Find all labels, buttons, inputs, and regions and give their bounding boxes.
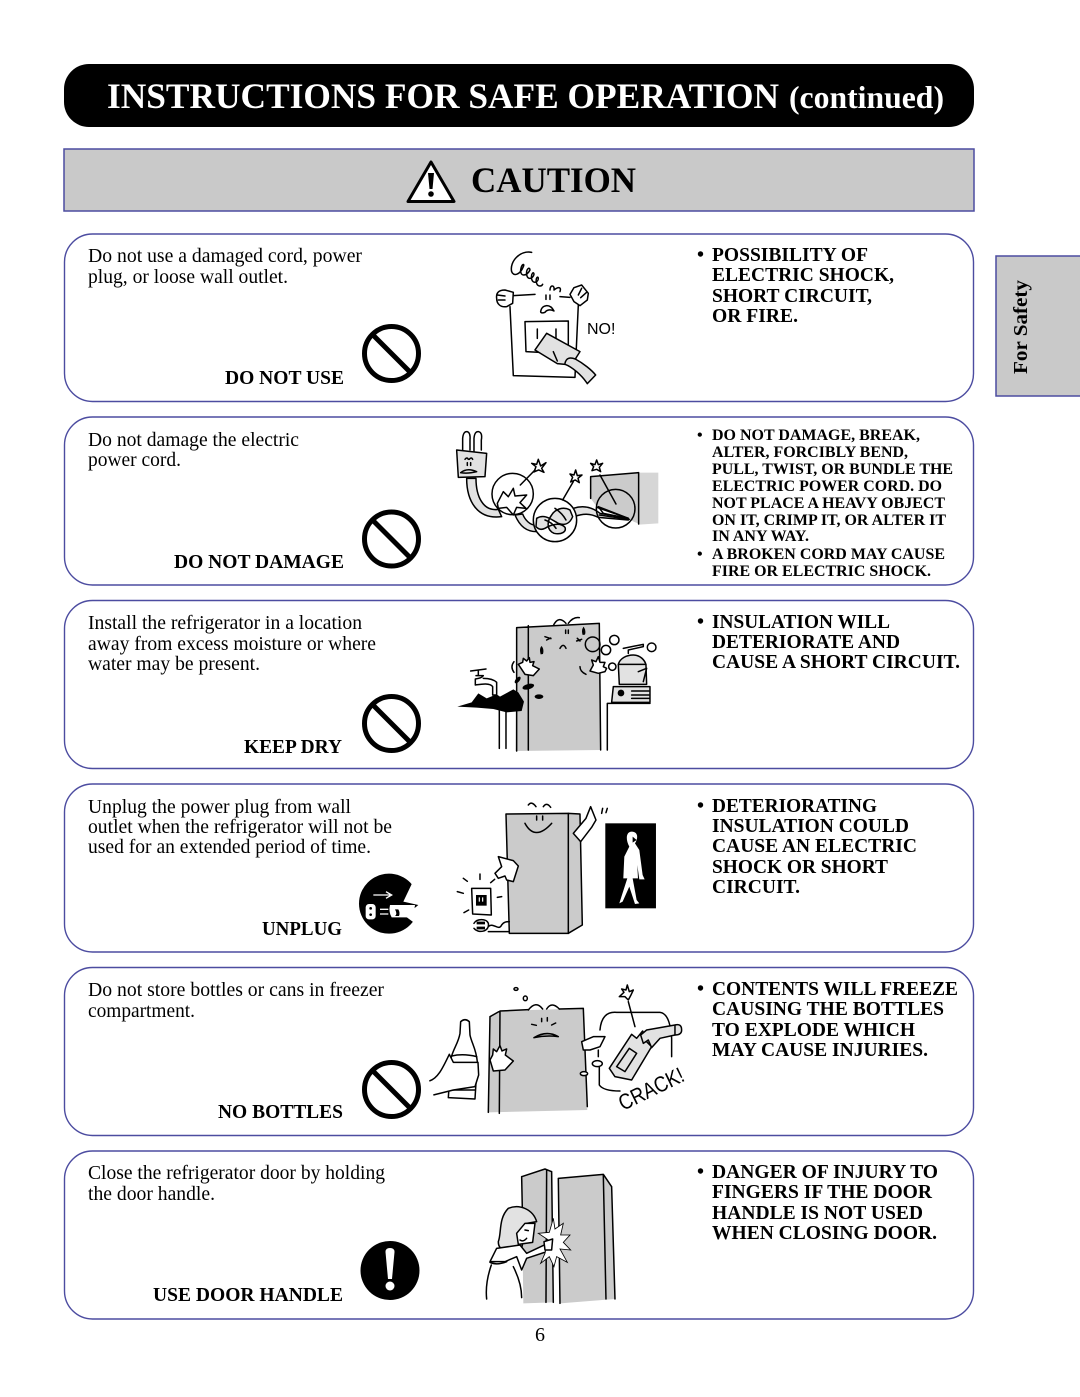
icon: prohibition [364, 512, 418, 566]
illustration: door closing on fingers [486, 1169, 615, 1303]
label: KEEP DRY [244, 736, 343, 758]
instruction text: Do not store bottles or cans in freezer [88, 979, 384, 1001]
panel: do not use [64, 234, 974, 402]
consequence text: CONTENTS WILL FREEZE [712, 978, 958, 1000]
illustration: damaged cord [457, 432, 658, 542]
title banner: (continued) [789, 79, 944, 115]
consequence text: OR FIRE. [712, 305, 798, 327]
caution banner [64, 149, 974, 211]
instruction text: plug, or loose wall outlet. [88, 266, 288, 288]
consequence text: POSSIBILITY OF [712, 244, 868, 266]
consequence text: SHOCK OR SHORT [712, 856, 889, 878]
consequence text: CAUSE AN ELECTRIC [712, 835, 917, 857]
instruction text: compartment. [88, 1000, 195, 1022]
consequence text: DETERIORATE AND [712, 631, 900, 653]
consequence text: WHEN CLOSING DOOR. [712, 1222, 937, 1244]
title banner [64, 64, 974, 127]
instruction text: water may be present. [88, 653, 260, 675]
icon: walking woman [605, 823, 656, 908]
consequence text: NOT PLACE A HEAVY OBJECT [712, 495, 945, 512]
consequence text [697, 611, 960, 673]
icon: prohibition [364, 696, 418, 750]
panel: unplug [64, 784, 974, 952]
consequence text: FINGERS IF THE DOOR [712, 1181, 933, 1203]
consequence text: • [697, 546, 703, 563]
panel: use door handle [64, 1151, 974, 1319]
consequence text: HANDLE IS NOT USED [712, 1202, 923, 1224]
instruction text: Do not use a damaged cord, power [88, 245, 362, 267]
consequence text: ALTER, FORCIBLY BEND, [712, 444, 908, 461]
illustration: fridge [457, 803, 607, 933]
instruction text: Do not damage the electric [88, 429, 299, 451]
consequence text: DO NOT DAMAGE, BREAK, [712, 427, 920, 444]
panel: keep dry [64, 600, 974, 768]
instruction text: Install the refrigerator in a location [88, 612, 362, 634]
instruction text [88, 979, 384, 1022]
consequence text: CAUSING THE BOTTLES [712, 998, 944, 1020]
instruction text [88, 612, 376, 675]
consequence text: ON IT, CRIMP IT, OR ALTER IT [712, 512, 946, 529]
consequence text: CIRCUIT. [712, 876, 800, 898]
illustration: bottles in freezer [429, 985, 682, 1113]
panel: no bottles [64, 968, 974, 1136]
consequence text: • [697, 244, 704, 266]
icon: unplug [359, 874, 428, 934]
text: crack: CRACK! [614, 1062, 688, 1115]
consequence text: IN ANY WAY. [712, 528, 809, 545]
instruction text: the door handle. [88, 1183, 215, 1205]
consequence text: ELECTRIC POWER CORD. DO [712, 478, 942, 495]
consequence text [697, 244, 894, 327]
caution banner: CAUTION [471, 160, 636, 200]
label: DO NOT DAMAGE [174, 551, 344, 573]
icon: prohibition [364, 326, 418, 380]
panel: do not damage [64, 417, 974, 585]
instruction text [88, 1162, 385, 1205]
instruction text: outlet when the refrigerator will not be [88, 816, 392, 838]
consequence text: • [697, 1161, 704, 1183]
label: USE DOOR HANDLE [153, 1284, 343, 1306]
instruction text: power cord. [88, 449, 181, 471]
consequence text: • [697, 795, 704, 817]
icon: warning triangle [408, 162, 454, 202]
illustration: plug in outlet [497, 252, 596, 384]
instruction text: Close the refrigerator door by holding [88, 1162, 385, 1184]
consequence text: SHORT CIRCUIT, [712, 285, 872, 307]
consequence text: FIRE OR ELECTRIC SHOCK. [712, 563, 931, 580]
consequence text: DETERIORATING [712, 795, 877, 817]
consequence text: • [697, 978, 704, 1000]
consequence text: DANGER OF INJURY TO [712, 1161, 938, 1183]
title banner: INSTRUCTIONS FOR SAFE OPERATION [107, 76, 779, 116]
consequence text: TO EXPLODE WHICH [712, 1019, 915, 1041]
instruction text: used for an extended period of time. [88, 836, 371, 858]
consequence text: MAY CAUSE INJURIES. [712, 1039, 928, 1061]
consequence text: A BROKEN CORD MAY CAUSE [712, 546, 945, 563]
label: DO NOT USE [225, 367, 344, 389]
consequence text: INSULATION COULD [712, 815, 909, 837]
instruction text [88, 796, 392, 858]
consequence text [697, 978, 958, 1061]
instruction text [88, 429, 299, 471]
icon: exclamation [360, 1241, 420, 1300]
consequence text: CAUSE A SHORT CIRCUIT. [712, 651, 960, 673]
label: UNPLUG [262, 918, 342, 940]
side tab: for safety [996, 256, 1080, 396]
consequence text [697, 1161, 938, 1244]
consequence text: INSULATION WILL [712, 611, 890, 633]
consequence text: ELECTRIC SHOCK, [712, 264, 894, 286]
consequence text: PULL, TWIST, OR BUNDLE THE [712, 461, 953, 478]
instruction text [88, 245, 362, 288]
consequence text: • [697, 611, 704, 633]
icon and illustration: unplug and fridge [359, 803, 656, 934]
consequence text: • [697, 427, 703, 444]
consequence text [697, 795, 917, 898]
consequence text [697, 427, 953, 580]
label: NO BOTTLES [218, 1101, 343, 1123]
instruction text: Unplug the power plug from wall [88, 796, 351, 818]
instruction text: away from excess moisture or where [88, 633, 376, 655]
illustration: moisture and fridge [457, 618, 656, 751]
page number: 6 [535, 1324, 545, 1346]
side tab: for safety: For Safety [1010, 280, 1032, 374]
icon: prohibition [364, 1062, 418, 1116]
text: no!: NO! [587, 321, 615, 338]
